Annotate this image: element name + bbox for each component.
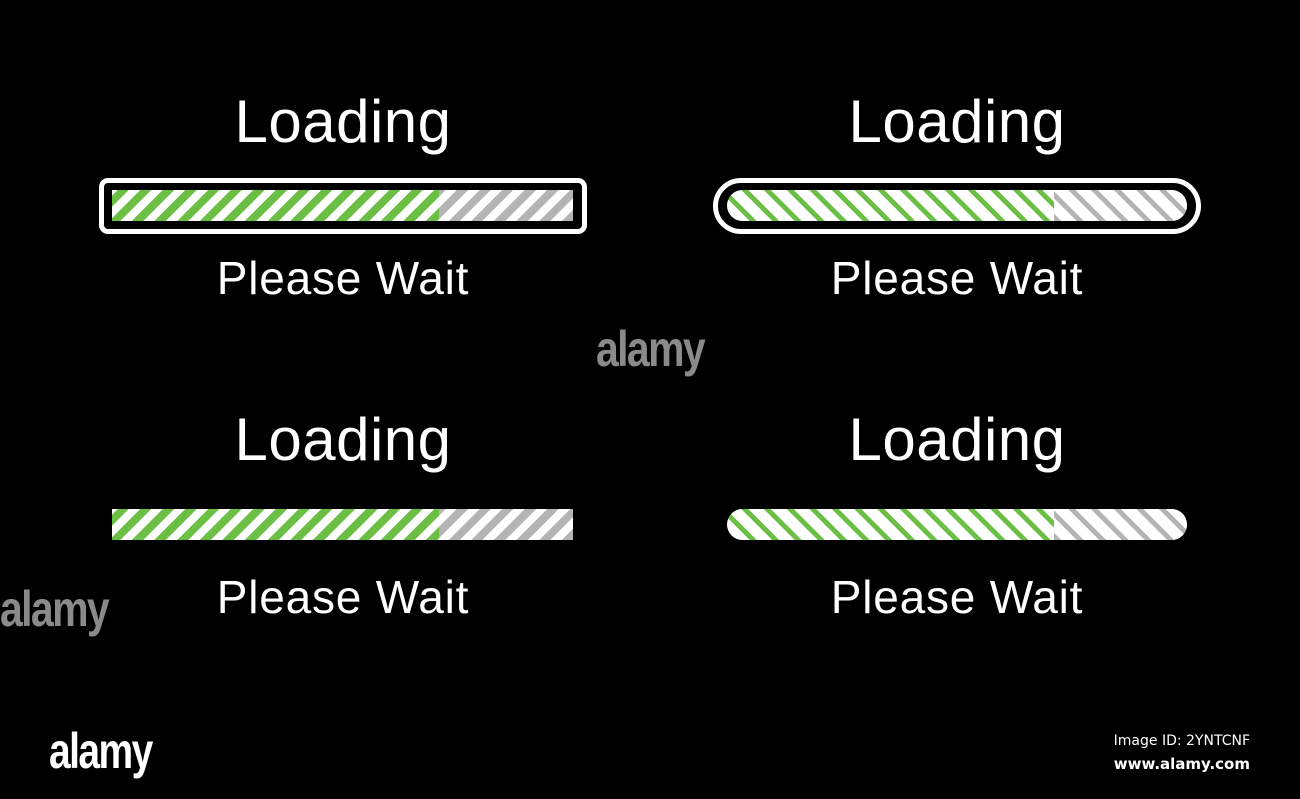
text: Please Wait: Please Wait	[831, 571, 1083, 623]
progress frame	[99, 178, 587, 234]
text: image id: Image ID: 2YNTCNF	[1114, 733, 1250, 749]
panel: top-right loader	[713, 88, 1201, 304]
watermark: center alamy: alamy	[596, 321, 704, 377]
progress bar	[112, 190, 573, 221]
progress frame	[713, 178, 1201, 234]
text: Please Wait: Please Wait	[217, 571, 469, 623]
text: Please Wait: Please Wait	[217, 252, 469, 304]
panel: bottom-right loader	[727, 406, 1187, 623]
progress bar	[727, 509, 1187, 540]
text: Please Wait: Please Wait	[831, 252, 1083, 304]
heading: Loading: Loading	[234, 88, 452, 155]
progress bar	[112, 509, 573, 540]
text: website: www.alamy.com	[1114, 755, 1250, 773]
panel: top-left loader	[99, 88, 587, 304]
heading: Loading: Loading	[848, 88, 1066, 155]
heading: Loading: Loading	[234, 406, 452, 473]
progress bar	[727, 190, 1187, 221]
panel: bottom-left loader	[112, 406, 573, 623]
watermark: left alamy: alamy	[0, 581, 108, 637]
heading: Loading: Loading	[848, 406, 1066, 473]
logo: alamy: alamy	[49, 723, 152, 779]
